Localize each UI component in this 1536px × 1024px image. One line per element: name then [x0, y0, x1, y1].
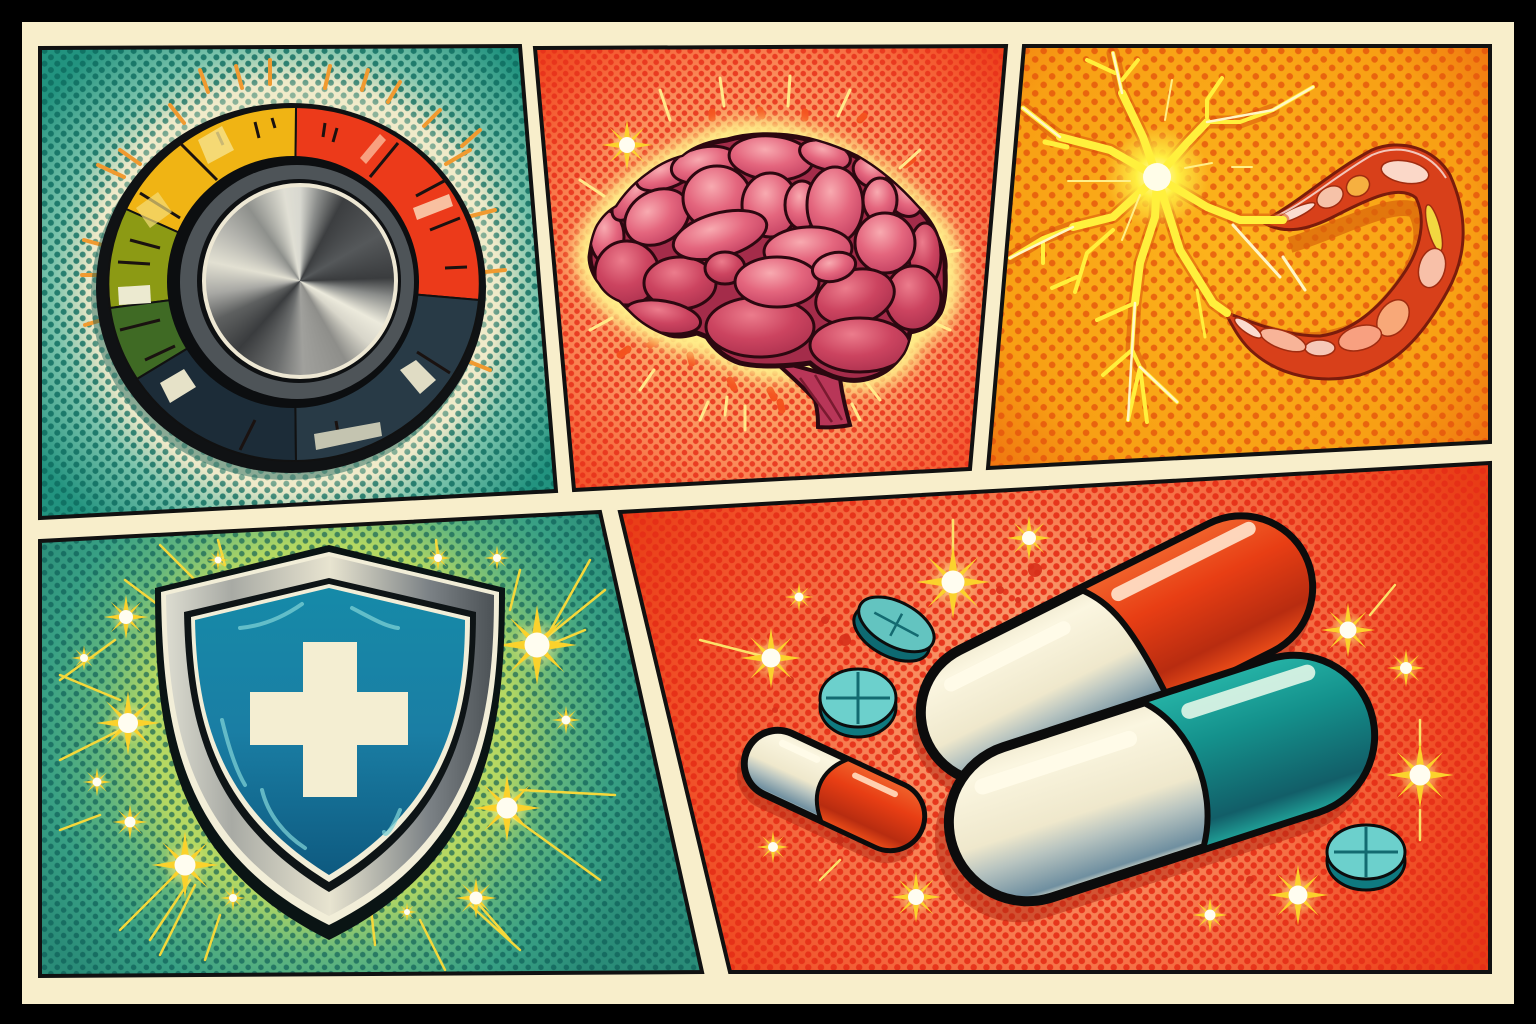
icon: red and white capsule [890, 487, 1342, 813]
icon: sparkle [1268, 865, 1328, 925]
icon: tablet round [820, 669, 896, 737]
icon: teal and white capsule [922, 630, 1400, 928]
icon: sparkle [455, 877, 497, 919]
icon: nerve fibre [1225, 145, 1463, 379]
icon: sparkle [552, 706, 580, 734]
icon: sparkle [890, 871, 942, 923]
icon: small capsule [729, 715, 939, 865]
icon: sparkle [1321, 603, 1375, 657]
panel: shield [40, 512, 702, 976]
icon: tablet right [1327, 825, 1405, 890]
icon: shield [155, 545, 505, 940]
icon: brain [590, 132, 945, 427]
icon: sparkle [1386, 741, 1454, 809]
icon: sparkle [112, 804, 148, 840]
icon: sparkle [83, 768, 111, 796]
icon: sparkle [1192, 897, 1228, 933]
icon: sparkle [397, 902, 417, 922]
icon: sparkle [1007, 516, 1051, 560]
icon: tablet tilted [845, 586, 943, 673]
icon: sparkle [484, 545, 510, 571]
icon: sparkle [220, 885, 246, 911]
icon: sparkle [785, 583, 813, 611]
icon: dial knob [167, 156, 419, 408]
icon: sparkle [916, 545, 990, 619]
icon: sparkle [104, 595, 148, 639]
icon: sparkle [71, 645, 97, 671]
panel: neuron [988, 46, 1490, 468]
icon: sparkle [497, 605, 577, 685]
icon: sparkle [473, 774, 541, 842]
icon: sparkle [151, 831, 219, 899]
panel: brain [535, 46, 1006, 490]
icon: sparkle [425, 545, 451, 571]
icon: dial ring [91, 103, 486, 480]
icon: sparkle [757, 831, 789, 863]
panel: volume dial [40, 46, 556, 518]
capsule drop shadows [725, 499, 1391, 944]
icon: sparkle [1387, 649, 1425, 687]
icon: neuron [1010, 53, 1313, 422]
icon: sparkle [741, 628, 801, 688]
icon: sparkle [96, 691, 160, 755]
icon: medical cross [250, 642, 408, 797]
icon: sparkle [601, 119, 653, 171]
icon: sparkle [207, 549, 229, 571]
panel: capsules [620, 463, 1490, 972]
